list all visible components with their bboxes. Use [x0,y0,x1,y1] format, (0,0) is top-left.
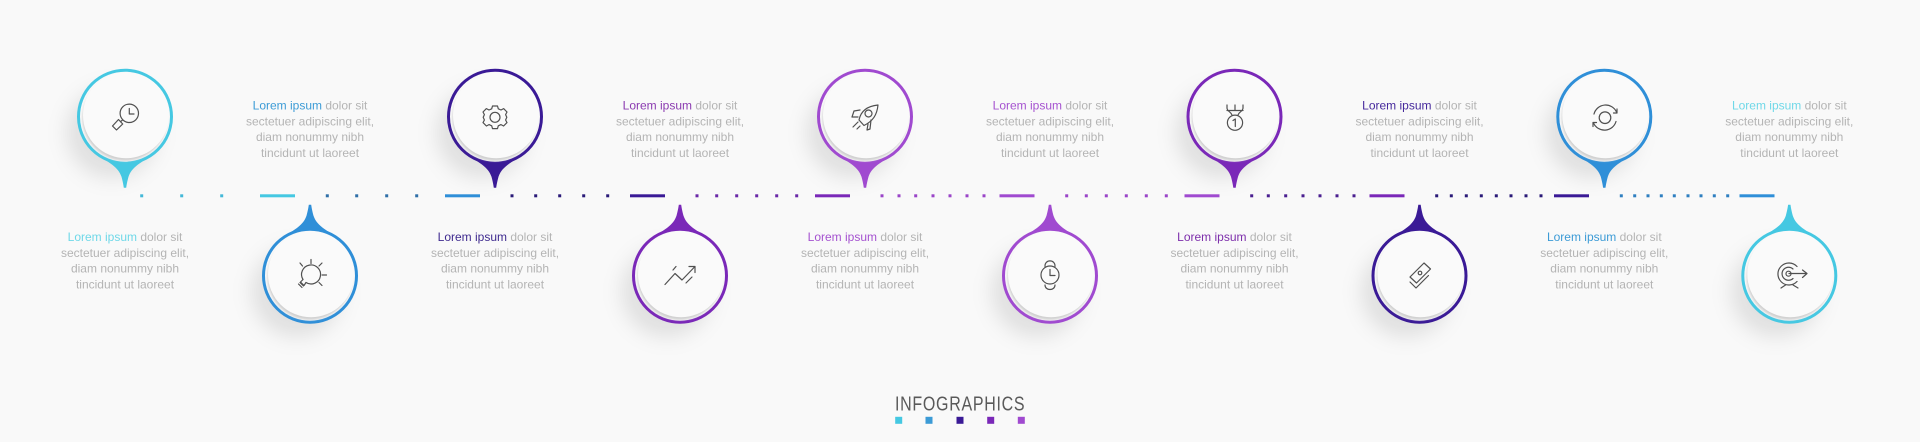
step 2 text: diam nonummy nibh [256,130,364,144]
step 3 text: Lorem ipsum dolor sit [438,230,553,244]
step 4 marker [622,205,726,337]
step 1 text: diam nonummy nibh [71,262,179,276]
icon: archery target [1778,263,1807,288]
step 7 text [1170,230,1299,291]
step 7 text: diam nonummy nibh [1180,262,1289,276]
step 2 text: tincidunt ut laoreet [261,146,360,160]
title colour squares [895,417,1025,424]
step 10 text [1725,99,1853,160]
step 8 text: sectetuer adipiscing elit, [1355,115,1484,129]
step 2 text [246,99,374,160]
step 8 text [1355,99,1484,160]
step 6 text: diam nonummy nibh [996,130,1104,144]
icon: refresh cycle [1593,105,1617,130]
step 5 text: diam nonummy nibh [811,262,919,276]
step 1 text: sectetuer adipiscing elit, [61,246,189,260]
icon: gear [483,106,507,129]
step 1 text: Lorem ipsum dolor sit [68,230,183,244]
icon: light bulb [298,260,326,288]
step 2 marker [252,205,356,337]
step 10 text: sectetuer adipiscing elit, [1725,115,1853,129]
step 10 marker [1731,205,1836,337]
step 2 text: sectetuer adipiscing elit, [246,115,374,129]
step 6 text [986,99,1114,160]
step 6 text: sectetuer adipiscing elit, [986,115,1114,129]
step 7 text: tincidunt ut laoreet [1185,277,1284,291]
step 3 text: diam nonummy nibh [441,262,549,276]
step 5 text: tincidunt ut laoreet [816,277,915,291]
step 9 text: diam nonummy nibh [1550,262,1658,276]
step 8 text: tincidunt ut laoreet [1370,146,1469,160]
icon: magnifier clock [112,104,138,130]
step 6 marker [992,205,1096,337]
step 8 marker [1362,205,1466,337]
step 8 text: Lorem ipsum dolor sit [1362,99,1478,113]
step 3 text: tincidunt ut laoreet [446,277,545,291]
icon: rising chart [665,266,695,284]
step 4 text: tincidunt ut laoreet [631,146,730,160]
timeline: dashes and dots [140,194,1775,197]
step 3 marker [437,70,542,188]
step 9 text [1540,230,1668,291]
icon: rocket [852,105,878,130]
step 1 text [61,230,189,291]
step 2 text: Lorem ipsum dolor sit [253,99,368,113]
step 10 text: diam nonummy nibh [1735,130,1843,144]
step 10 text: tincidunt ut laoreet [1740,146,1839,160]
step 5 text [801,230,929,291]
step 4 text [616,99,744,160]
step 1 marker [67,70,172,188]
icon: wristwatch [1041,261,1059,290]
step 9 text: sectetuer adipiscing elit, [1540,246,1668,260]
step 5 text: Lorem ipsum dolor sit [808,230,923,244]
step 9 text: tincidunt ut laoreet [1555,277,1654,291]
step 9 text: Lorem ipsum dolor sit [1547,230,1662,244]
step 4 text: Lorem ipsum dolor sit [623,99,738,113]
step 4 text: diam nonummy nibh [626,130,734,144]
step 5 text: sectetuer adipiscing elit, [801,246,929,260]
step 8 text: diam nonummy nibh [1365,130,1474,144]
step 3 text [431,230,559,291]
step 7 text: sectetuer adipiscing elit, [1170,246,1299,260]
step 6 text: Lorem ipsum dolor sit [993,99,1108,113]
step 1 text: tincidunt ut laoreet [76,277,175,291]
step 7 marker [1176,70,1281,188]
step 7 text: Lorem ipsum dolor sit [1177,230,1293,244]
step 9 marker [1546,70,1651,188]
step 10 text: Lorem ipsum dolor sit [1732,99,1847,113]
icon: medal [1227,105,1243,130]
step 4 text: sectetuer adipiscing elit, [616,115,744,129]
step 6 text: tincidunt ut laoreet [1001,146,1100,160]
icon: banknotes [1410,263,1430,288]
step 3 text: sectetuer adipiscing elit, [431,246,559,260]
step 5 marker [807,70,912,188]
title: INFOGRAPHICS [895,393,1025,415]
